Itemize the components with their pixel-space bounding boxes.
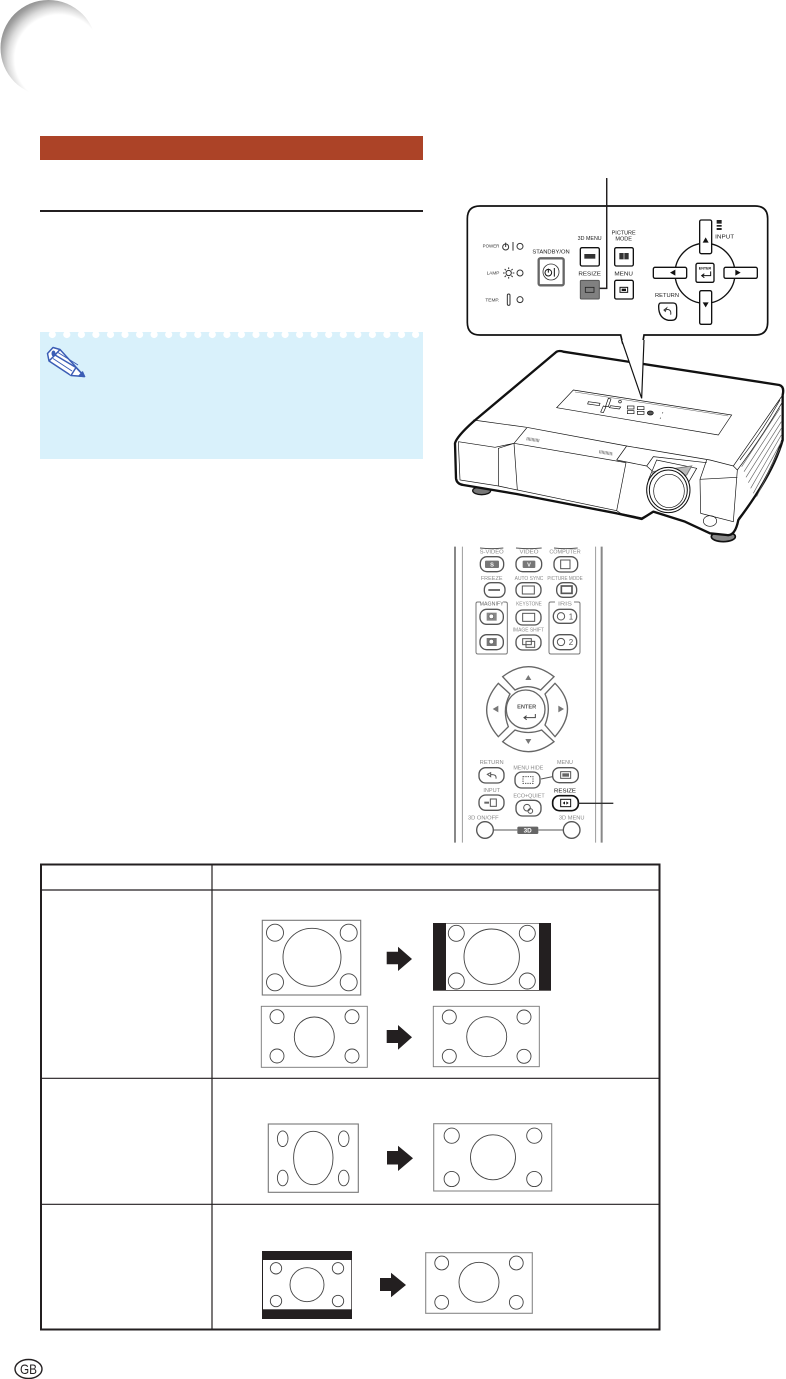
remote labels: S-VIDEO [480, 550, 504, 556]
standby button: STANDBY/ON [532, 249, 570, 255]
remote labels: COMPUTER [549, 550, 581, 556]
remote labels [468, 550, 584, 821]
resize button: RESIZE [578, 271, 601, 277]
heading bar [40, 136, 423, 160]
resize button and callout [553, 796, 613, 811]
pointer from control panel [622, 340, 644, 398]
remote labels: FREEZE [481, 576, 503, 582]
directional keys: ENTER [517, 705, 536, 711]
remote labels: IRIS [558, 601, 572, 607]
remote labels: 3D MENU [559, 815, 584, 821]
magnify group [476, 602, 507, 654]
row 1 diagram B: wide to wide [261, 1006, 539, 1067]
source buttons [480, 557, 578, 572]
directional keys [487, 667, 567, 752]
indicator labels and lamps: TEMP. [485, 297, 499, 303]
3D menu button: 3D MENU [578, 236, 602, 242]
keystone and image shift buttons [516, 610, 541, 650]
remote labels: VIDEO [519, 550, 539, 556]
front grilles [527, 439, 613, 454]
section rule [40, 210, 423, 212]
3D buttons: 3D [524, 828, 532, 835]
projector top panel [557, 390, 732, 435]
remote labels: 3D ON/OFF [468, 815, 499, 821]
panel: note [40, 331, 423, 459]
decorative title circle [0, 0, 96, 96]
picture mode button: PICTURE [612, 230, 636, 236]
picture mode button: MODE [615, 236, 632, 242]
remote labels: PICTURE MODE [547, 576, 583, 582]
indicator labels and lamps [483, 242, 523, 305]
input label: INPUT [715, 234, 735, 240]
remote labels: RESIZE [554, 788, 576, 794]
iris group: 1 [569, 612, 574, 621]
3D menu button [578, 236, 602, 266]
projector foot left [473, 487, 491, 495]
projector body outline [455, 351, 783, 535]
front sensor [703, 516, 717, 526]
projector side vents [742, 408, 781, 497]
resize button [578, 271, 601, 299]
return button [655, 293, 679, 320]
remote labels: IMAGE SHIFT [513, 628, 544, 634]
indicator labels and lamps: LAMP [487, 271, 500, 277]
row 3 diagram: letterbox to wide [262, 1251, 532, 1319]
direction pad [653, 220, 757, 324]
illustration: projector [455, 340, 783, 542]
projector foot right [711, 532, 735, 542]
function buttons row [484, 583, 577, 597]
remote labels: MAGNIFY [480, 601, 504, 607]
icon: pencil [48, 348, 84, 376]
badge: GB [15, 1360, 42, 1378]
remote labels: MENU [557, 760, 573, 766]
illustration: remote control [455, 547, 613, 843]
badge: GB: GB [20, 1361, 37, 1377]
indicator labels and lamps: POWER [483, 244, 500, 250]
remote labels: AUTO SYNC [515, 576, 543, 582]
callout line: resize button on projector [595, 178, 607, 288]
remote labels: RETURN [480, 760, 504, 766]
table: resize modes [41, 864, 660, 1330]
menu button [614, 271, 633, 299]
source buttons: S [490, 563, 494, 569]
table grid lines [41, 865, 659, 1329]
picture mode button [612, 230, 636, 266]
panel: projector control panel [467, 178, 768, 343]
input label [715, 220, 735, 240]
projector front edges [458, 395, 783, 522]
row 1 diagram A: 4:3 to side-bars [262, 920, 551, 995]
return button: RETURN [655, 293, 679, 299]
standby button [532, 249, 570, 285]
row 2 diagram: squeezed to wide [268, 1124, 552, 1192]
iris group [549, 602, 580, 654]
direction pad: ENTER [699, 267, 712, 271]
table outer frame [41, 864, 660, 1330]
lower buttons [479, 768, 578, 816]
iris group: 2 [569, 638, 574, 647]
remote body sides [455, 547, 602, 843]
menu button: MENU [614, 271, 633, 277]
source buttons: V [527, 563, 531, 569]
remote labels: ECO+QUIET [513, 794, 545, 800]
projector lens [647, 460, 697, 513]
3D buttons [477, 822, 580, 838]
remote labels: INPUT [483, 788, 501, 794]
remote labels: MENU HIDE [513, 765, 544, 771]
remote labels: KEYSTONE [516, 601, 542, 607]
